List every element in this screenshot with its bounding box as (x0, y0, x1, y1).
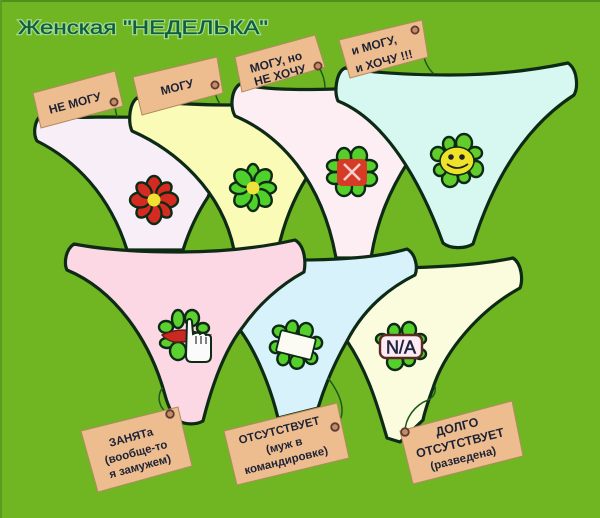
tag: МОГУ (133, 57, 223, 115)
icon: flower with white patch (265, 315, 326, 373)
tag: ЗАНЯТа: (вообще-то (104, 439, 169, 467)
tag: НЕ МОГУ: НЕ МОГУ (47, 89, 103, 117)
tag: и МОГУ, и ХОЧУ: и МОГУ, (350, 32, 398, 58)
tag: МОГУ, но НЕ ХОЧУ: НЕ ХОЧУ (253, 61, 308, 89)
garment: НЕ МОГУ (35, 115, 240, 250)
tag: МОГУ: МОГУ (159, 76, 196, 98)
icon: N/A flower (376, 322, 426, 370)
garment: ОТСУТСТВУЕТ (240, 249, 416, 418)
garment: ЗАНЯТа (65, 240, 305, 424)
garment: ДОЛГО ОТСУТСТВУЕТ (347, 258, 522, 442)
tag: ЗАНЯТа (81, 388, 192, 492)
tag: МОГУ, но НЕ ХОЧУ (235, 35, 325, 92)
tag: МОГУ, но НЕ ХОЧУ: МОГУ, но (248, 48, 304, 76)
tag: НЕ МОГУ (33, 71, 123, 128)
icon: green flower (230, 164, 276, 211)
title: Женская "НЕДЕЛЬКА" (18, 18, 268, 39)
tag: ОТСУТСТВУЕТ (224, 378, 349, 485)
tag: ДОЛГО ОТСУТСТВУЕТ: ОТСУТСТВУЕТ (415, 425, 506, 461)
tag: и МОГУ, и ХОЧУ: и ХОЧУ !!! (354, 47, 414, 76)
garment: МОГУ, но НЕ ХОЧУ (232, 84, 440, 258)
icon: smiling flower (431, 134, 483, 187)
tag: ОТСУТСТВУЕТ: командировке) (243, 445, 329, 477)
tag: ДОЛГО ОТСУТСТВУЕТ: ДОЛГО (434, 415, 480, 439)
tag: ДОЛГО ОТСУТСТВУЕТ: (разведена) (429, 445, 498, 473)
garment: и МОГУ, и ХОЧУ (336, 63, 576, 248)
icon: red flower (130, 176, 178, 224)
icon: pointing hand (186, 319, 211, 362)
title: Женская "НЕДЕЛЬКА" (18, 18, 268, 39)
tag: ОТСУТСТВУЕТ: ОТСУТСТВУЕТ (238, 415, 321, 447)
icon: N/A flower: N/A (386, 338, 416, 358)
tag: ЗАНЯТа: я замужем) (108, 453, 173, 481)
icon: flower with hand (159, 310, 211, 362)
tag: ДОЛГО ОТСУТСТВУЕТ (400, 386, 523, 484)
garment: МОГУ (130, 98, 340, 250)
icon: crossed flower (327, 147, 377, 196)
tag: ОТСУТСТВУЕТ: (муж в (265, 436, 304, 456)
tag: и МОГУ, и ХОЧУ (339, 20, 434, 78)
tag: ЗАНЯТа: ЗАНЯТа (108, 426, 155, 450)
